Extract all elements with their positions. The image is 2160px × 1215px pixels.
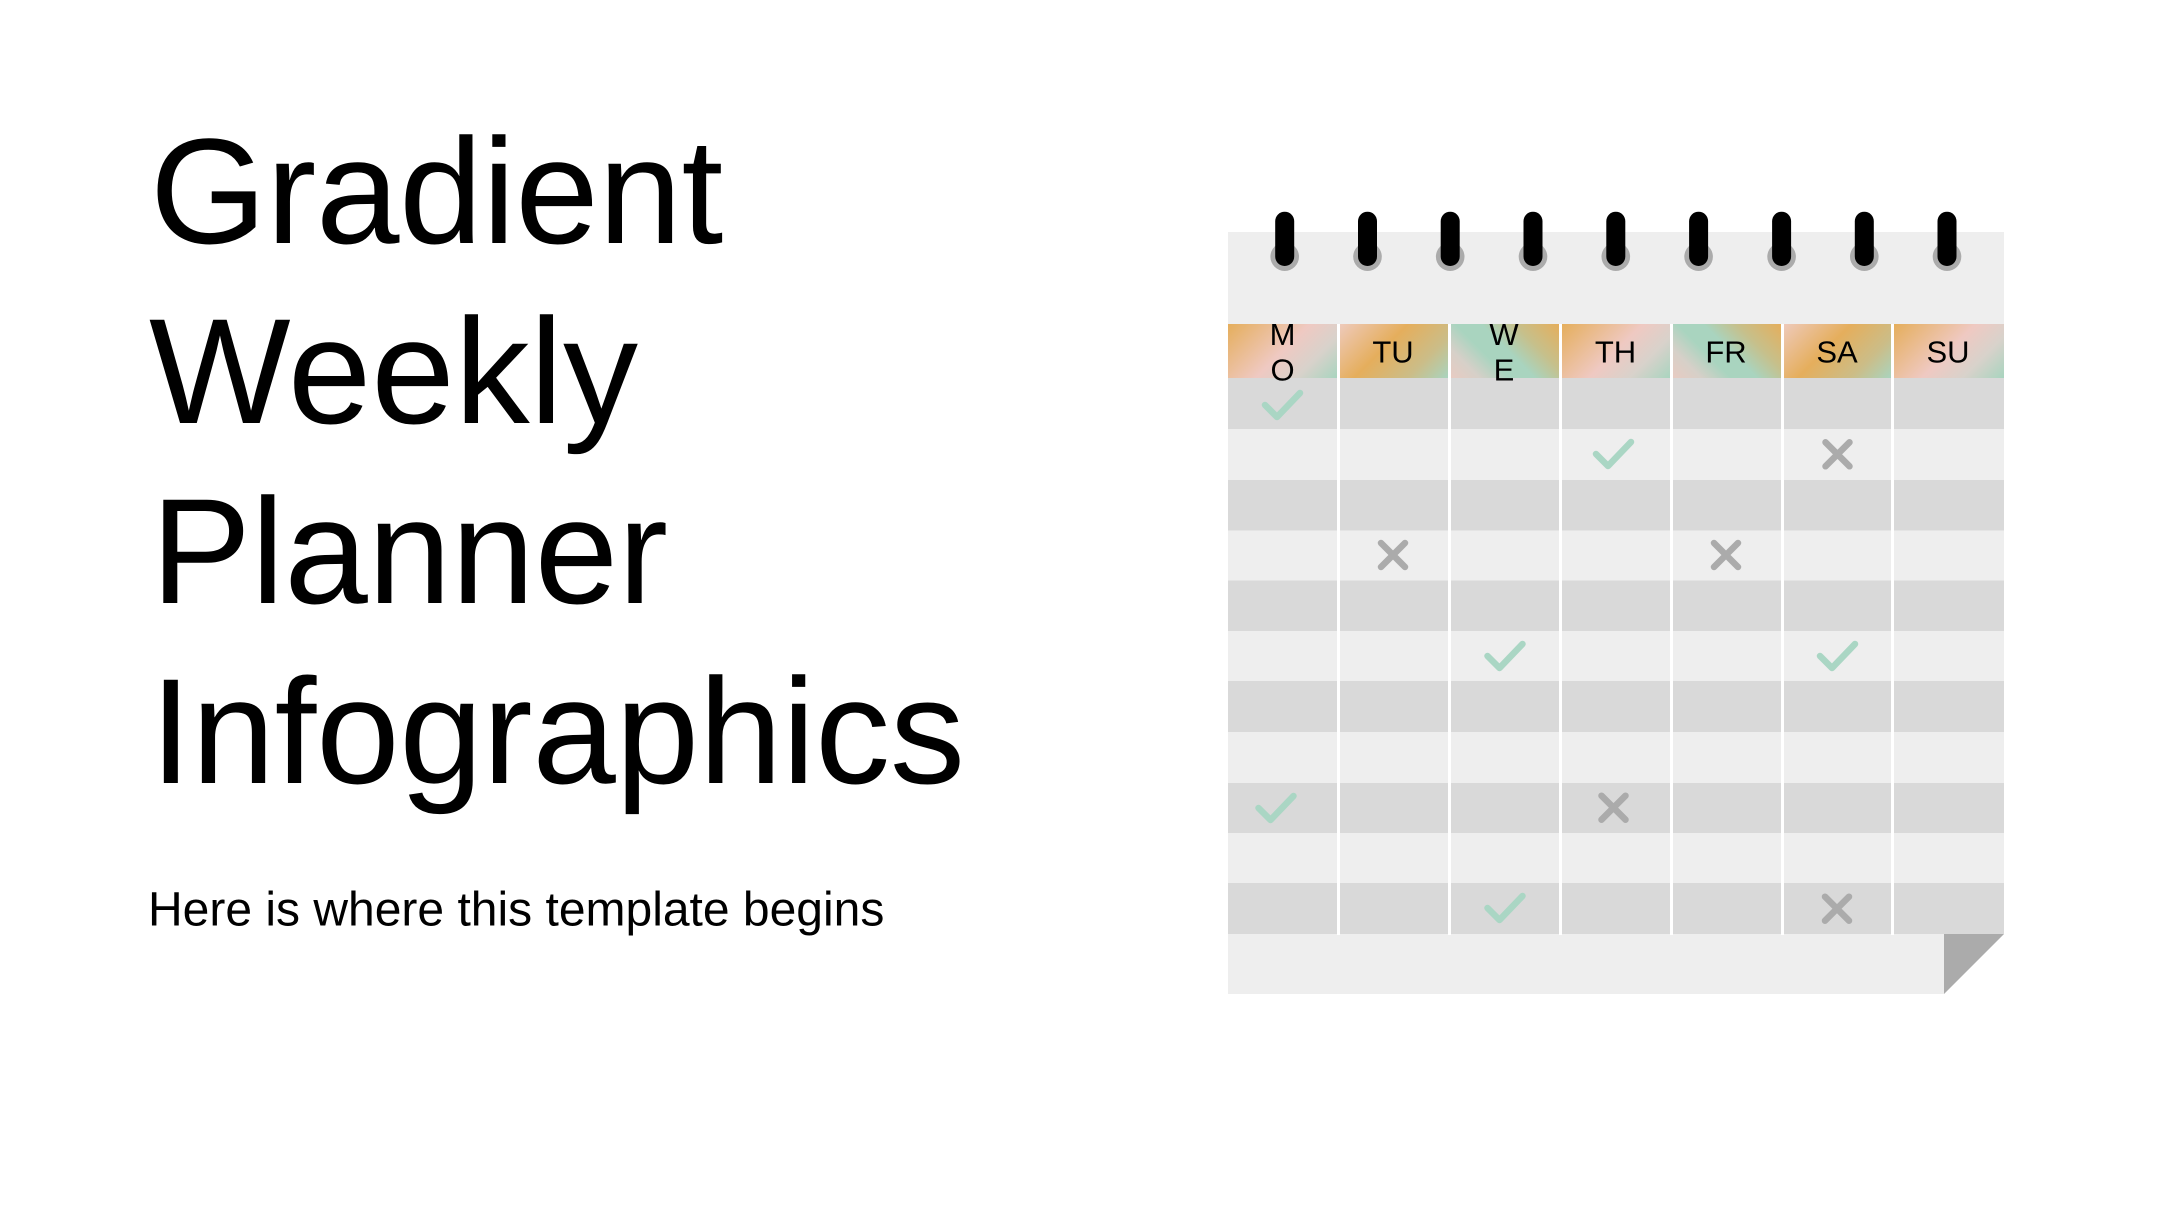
subtitle: Here is where this template begins xyxy=(148,884,884,936)
page fold xyxy=(1944,934,2004,994)
weekday labels: SA xyxy=(1816,335,1858,370)
title: Infographics xyxy=(150,647,965,815)
title: Weekly xyxy=(149,287,638,455)
spiral binding xyxy=(1270,212,1961,271)
weekday labels: M xyxy=(1270,317,1295,352)
cross marks xyxy=(1381,442,1850,921)
calendar xyxy=(1228,212,2004,994)
weekday labels xyxy=(1270,317,1970,388)
weekday labels: O xyxy=(1270,352,1295,388)
title: Planner xyxy=(151,467,668,635)
weekday labels: TH xyxy=(1595,335,1636,370)
weekday header cells xyxy=(1228,324,2004,378)
check marks xyxy=(1258,393,1855,920)
weekday labels: FR xyxy=(1705,335,1747,370)
weekday labels: W xyxy=(1489,317,1519,352)
table rows xyxy=(1228,378,2004,934)
weekday labels: SU xyxy=(1926,335,1970,370)
weekday labels: TU xyxy=(1372,335,1414,370)
title xyxy=(149,107,965,815)
weekday labels: E xyxy=(1494,352,1514,388)
title: Gradient xyxy=(150,107,723,275)
calendar page xyxy=(1228,232,2004,994)
column dividers xyxy=(1337,324,1894,935)
